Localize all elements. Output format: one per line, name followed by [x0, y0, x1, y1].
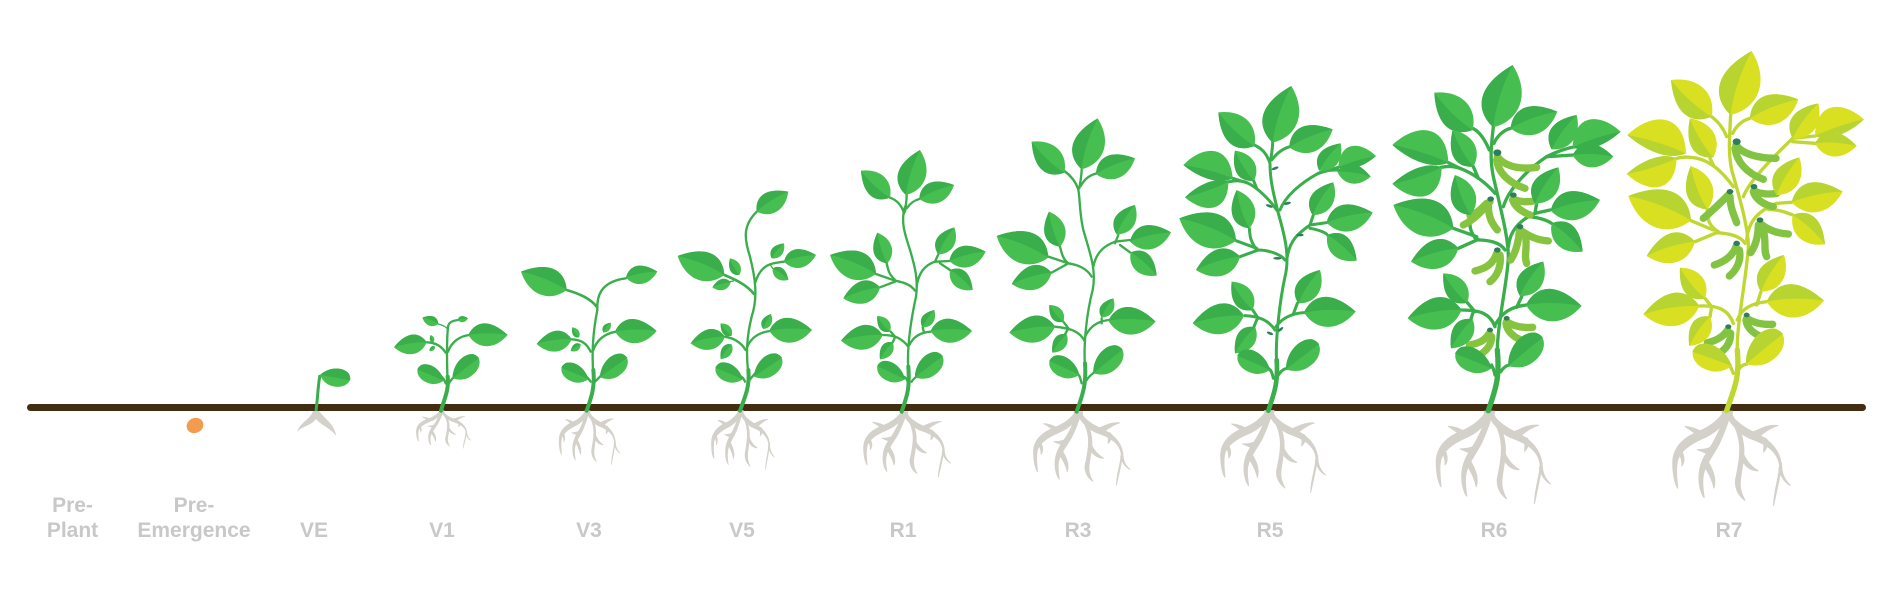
V3 roots — [559, 411, 620, 465]
label: V5: V5 — [729, 519, 755, 542]
label: R6: R6 — [1481, 519, 1507, 542]
R5 roots — [1221, 411, 1325, 492]
VE roots — [297, 411, 336, 436]
stage labels — [47, 494, 1742, 542]
R6 leaves — [1387, 59, 1623, 378]
plant: R5 — [1173, 80, 1378, 492]
R7 roots — [1673, 411, 1790, 505]
label: R3: R3 — [1065, 519, 1091, 542]
label: V3: V3 — [576, 519, 602, 542]
plant: R3 — [990, 114, 1174, 485]
V3 stems — [567, 278, 626, 411]
R5 flower buds — [1265, 166, 1304, 336]
R3 roots — [1034, 412, 1130, 485]
label: V1: V1 — [429, 519, 455, 542]
R5 leaves — [1173, 80, 1378, 378]
plant: R6 — [1387, 59, 1623, 504]
R1 roots — [864, 412, 950, 477]
V5 roots — [711, 411, 774, 469]
R7 leaves — [1621, 45, 1866, 376]
plant: R1 — [825, 146, 988, 477]
plant: R7 — [1621, 45, 1866, 505]
R5 stems — [1225, 142, 1338, 411]
plant: V3 — [516, 258, 659, 465]
V3 leaves — [516, 258, 659, 386]
label: Pre-Emergence: Emergence — [137, 519, 251, 542]
R1 stems — [876, 195, 950, 412]
label: VE: VE — [300, 519, 328, 542]
label: Pre-Plant: Plant — [47, 519, 98, 542]
R3 stems — [1048, 169, 1130, 412]
plant: VE — [297, 364, 352, 436]
R7 stems — [1677, 115, 1815, 411]
seed: pre-emergence — [184, 415, 206, 436]
R6 roots — [1436, 411, 1550, 504]
label: R1: R1 — [890, 519, 917, 542]
R6 stems — [1441, 127, 1575, 411]
V5 leaves — [672, 182, 818, 386]
plant: V5 — [672, 182, 818, 469]
V1 leaves — [393, 313, 508, 387]
V5 stems — [724, 212, 784, 411]
VE stem — [316, 375, 320, 411]
V1 roots — [416, 411, 471, 448]
VE leaf — [318, 364, 352, 390]
R6 pods — [1463, 149, 1548, 355]
R7 pods — [1703, 138, 1788, 353]
label: Pre-Plant: Pre- — [52, 494, 93, 517]
label: R7: R7 — [1716, 519, 1742, 542]
V1 stems — [427, 320, 469, 411]
ground line — [27, 404, 1866, 411]
R1 leaves — [825, 146, 988, 386]
plant: V1 — [393, 313, 508, 448]
label: Pre-Emergence: Pre- — [174, 494, 214, 517]
label: R5: R5 — [1257, 519, 1284, 542]
R3 leaves — [990, 114, 1174, 383]
